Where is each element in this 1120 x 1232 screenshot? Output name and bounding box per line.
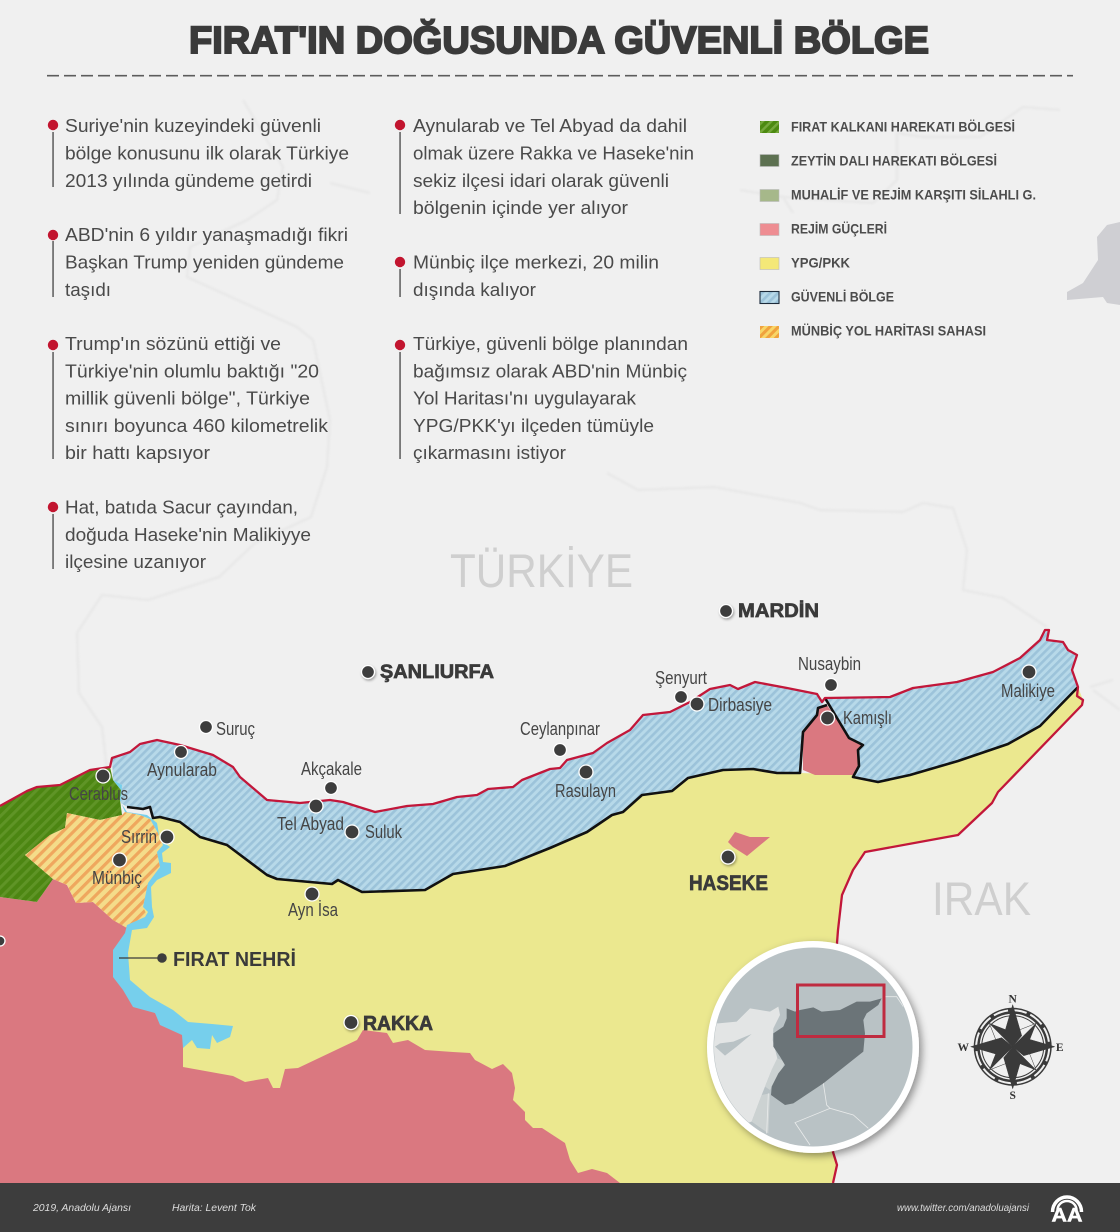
compass letters: W (957, 1042, 969, 1054)
city: Şenyurt (655, 667, 707, 704)
city: Aynularab: Aynularab (147, 759, 217, 780)
bullet: fifth point: bölgenin içinde yer alıyor (413, 197, 628, 218)
logo: Anadolu Agency: AA (1052, 1206, 1083, 1226)
city: Akçakale (301, 758, 362, 794)
bullet: second point: ABD'nin 6 yıldır yanaşmadığı fikri (65, 224, 348, 245)
inset locator map (700, 941, 919, 1153)
city: Akçakale: Akçakale (301, 758, 362, 779)
compass letters (957, 994, 1064, 1102)
legend item: Rejim (760, 220, 887, 236)
bullet: sixth point: Münbiç ilçe merkezi, 20 milin (413, 252, 659, 272)
title: FIRAT'IN DOĞUSUNDA GÜVENLİ BÖLGE (189, 18, 929, 62)
footer credit: 2019, Anadolu Ajansı (32, 1202, 131, 1214)
bullet: seventh point: Yol Haritası'nı uygulayarak (413, 388, 637, 408)
legend item: YPG/PKK: YPG/PKK (791, 254, 850, 270)
city: Dirbasiye (690, 694, 772, 715)
city: Malikiye (1001, 665, 1055, 701)
bullet: sixth point: dışında kalıyor (413, 279, 536, 300)
city: Cerablus (69, 769, 128, 804)
bullet: fifth point: olmak üzere Rakka ve Haseke'nin (413, 142, 694, 164)
city: Suluk (345, 821, 403, 842)
region: Münbiç road map (25, 812, 163, 928)
river: Euphrates (113, 780, 233, 1049)
bullet: second point: taşıdı (65, 279, 111, 300)
city: Haseke (689, 850, 768, 895)
city: Rakka: RAKKA (363, 1013, 433, 1035)
city dot at left edge (0, 936, 5, 946)
legend item: Münbiç: MÜNBİÇ YOL HARİTASI SAHASI (791, 322, 986, 338)
city: Suruç (200, 718, 255, 739)
compass rose (957, 994, 1064, 1102)
region: safe zone (112, 630, 1078, 892)
city: Dirbasiye: Dirbasiye (708, 694, 772, 715)
city: Kamışlı (820, 707, 892, 728)
region: Kamışlı regime pocket (803, 705, 863, 775)
city: Ayn İsa: Ayn İsa (288, 899, 339, 920)
line: Turkey and Iraq border (0, 630, 1083, 1183)
callout: Fırat Nehri (119, 948, 296, 971)
compass letters: E (1056, 1042, 1064, 1054)
city: Şanlıurfa: ŞANLIURFA (380, 661, 494, 683)
city: Ceylanpınar: Ceylanpınar (520, 718, 600, 739)
background terrain lines (77, 100, 1120, 770)
city: Nusaybin (798, 653, 861, 692)
bullet: first point (48, 115, 349, 191)
bullet: fifth point (395, 115, 694, 218)
city: Suluk: Suluk (365, 821, 403, 842)
city: Şenyurt: Şenyurt (655, 667, 707, 688)
bullet: third point: bir hattı kapsıyor (65, 442, 210, 463)
city: Malikiye: Malikiye (1001, 680, 1055, 701)
bullet: third point: sınırı boyunca 460 kilometrelik (65, 415, 329, 436)
text block: left column (48, 115, 349, 572)
city: Sırrin: Sırrin (121, 826, 157, 847)
inset: Cyprus (715, 1034, 752, 1056)
region: YPG/PKK (110, 687, 1083, 1183)
line: safe zone limit (127, 687, 1078, 892)
inset: Syria (771, 998, 882, 1105)
compass letters: S (1009, 1090, 1016, 1102)
bullet: seventh point: YPG/PKK'yı ilçeden tümüyle (413, 415, 654, 436)
map (0, 630, 1083, 1183)
country label: Türkiye: TÜRKİYE (450, 544, 633, 597)
region: regime forces (0, 879, 620, 1183)
city: Rasulayn: Rasulayn (555, 780, 616, 801)
region: Haseke regime pocket (728, 832, 770, 856)
bullet: second point: Başkan Trump yeniden gündeme (65, 252, 344, 272)
bullet: fourth point: ilçesine uzanıyor (65, 551, 206, 572)
bullet: fifth point: sekiz ilçesi idari olarak güvenli (413, 170, 669, 191)
legend item: YPG/PKK (760, 254, 850, 270)
city: Tel Abyad: Tel Abyad (277, 813, 344, 834)
bullet: seventh point: Türkiye, güvenli bölge planından (413, 333, 688, 354)
footer bar (0, 1183, 1120, 1232)
footer link: www.twitter.com/anadoluajansi (897, 1202, 1030, 1214)
city: Tel Abyad (277, 799, 344, 834)
bullet: third point (48, 333, 329, 463)
legend item: Rejim: REJİM GÜÇLERİ (791, 220, 887, 236)
city: Nusaybin: Nusaybin (798, 653, 861, 674)
logo: Anadolu Agency (1052, 1197, 1083, 1226)
inset: Lebanon and Israel (752, 1058, 785, 1133)
city: Münbiç (92, 853, 142, 888)
city: Kamışlı: Kamışlı (843, 707, 892, 728)
city: Aynularab (147, 746, 217, 780)
city: Münbiç: Münbiç (92, 867, 142, 888)
text block: middle column (395, 115, 694, 463)
city: Rasulayn (555, 765, 616, 801)
bullet: fourth point: Hat, batıda Sacur çayından, (65, 496, 298, 518)
city: Suruç: Suruç (216, 718, 255, 739)
city: Ayn İsa (288, 887, 339, 920)
legend (760, 118, 1036, 338)
bullet: fourth point: doğuda Haseke'nin Malikiyye (65, 524, 311, 545)
bullet: third point: Trump'ın sözünü ettiği ve (65, 333, 281, 354)
compass letters: N (1009, 994, 1018, 1006)
bullet: first point: 2013 yılında gündeme getirdi (65, 170, 312, 191)
city: Haseke: HASEKE (689, 872, 768, 895)
bullet: third point: Türkiye'nin olumlu baktığı "20 (65, 360, 319, 382)
bullet: sixth point (395, 252, 659, 300)
bullet: second point (48, 224, 348, 300)
bullet: third point: millik güvenli bölge", Türkiye (65, 388, 310, 408)
footer map credit: Harita: Levent Tok (172, 1202, 257, 1214)
bullet: first point: Suriye'nin kuzeyindeki güvenli (65, 115, 321, 136)
legend item: Zeytin Dalı: ZEYTİN DALI HAREKATI BÖLGESİ (791, 152, 997, 168)
city: Ceylanpınar (520, 718, 600, 756)
bullet: fourth point (48, 496, 311, 572)
city: Mardin: MARDİN (738, 599, 819, 622)
bullet: seventh point: çıkarmasını istiyor (413, 442, 566, 463)
callout: Fırat Nehri: FIRAT NEHRİ (173, 948, 296, 971)
country label: Irak: IRAK (932, 872, 1031, 925)
inset: highlight rectangle (798, 985, 884, 1036)
legend item: Muhalif: MUHALİF VE REJİM KARŞITI SİLAHLI G. (791, 186, 1036, 202)
bullet: fifth point: Aynularab ve Tel Abyad da dahil (413, 115, 687, 136)
legend item: Fırat Kalkanı: FIRAT KALKANI HAREKATI BÖLGESİ (791, 118, 1015, 134)
city: Cerablus: Cerablus (69, 783, 128, 804)
inset: sea (714, 1006, 780, 1122)
neighbouring lake shape (1067, 222, 1120, 305)
region: Fırat Kalkanı (0, 767, 122, 902)
legend item: Güvenli Bölge: GÜVENLİ BÖLGE (791, 288, 894, 304)
bullet: seventh point: bağımsız olarak ABD'nin Münbiç (413, 360, 687, 382)
bullet: seventh point (395, 333, 688, 463)
bullet: first point: bölge konusunu ilk olarak Türkiye (65, 142, 349, 164)
